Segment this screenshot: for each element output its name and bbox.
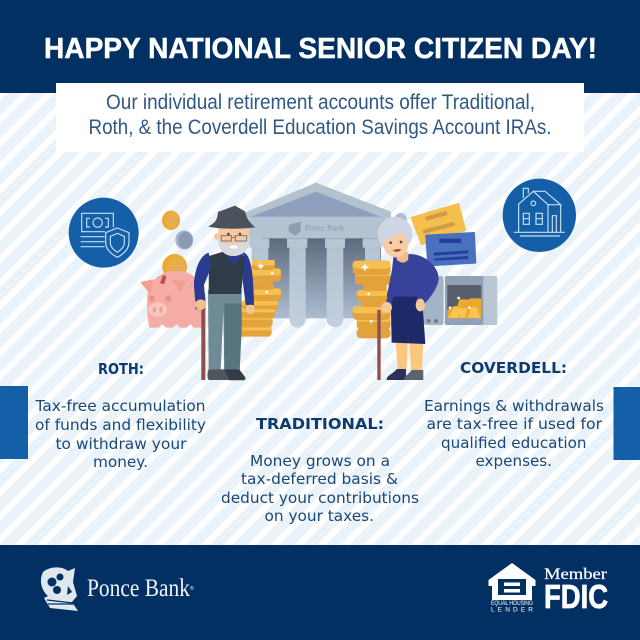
fdic text: FDIC <box>544 579 608 616</box>
traditional heading: TRADITIONAL: <box>256 415 384 433</box>
intro panel <box>56 83 584 152</box>
roth description: Tax-free accumulation <box>34 397 206 415</box>
bank name: Ponce Bank <box>87 575 190 602</box>
illustration: seniors with bank <box>141 183 497 380</box>
coverdell description: expenses. <box>476 452 552 470</box>
traditional description: Money grows on a <box>250 452 390 470</box>
senior man <box>194 206 255 380</box>
traditional column <box>221 415 419 525</box>
cards, phone and safe <box>412 204 497 325</box>
roth column <box>34 360 206 471</box>
equal housing lender logo <box>488 563 536 614</box>
ponce bank logo <box>41 567 194 611</box>
intro text: Roth, & the Coverdell Education Savings Account IRAs. <box>88 115 552 139</box>
roth description: of funds and flexibility <box>35 416 206 434</box>
coverdell column <box>424 359 604 470</box>
footer band <box>0 545 640 640</box>
senior woman <box>377 213 439 380</box>
traditional description <box>221 452 419 525</box>
roth description <box>34 397 206 471</box>
title: HAPPY NATIONAL SENIOR CITIZEN DAY! <box>44 33 597 65</box>
registered mark: ® <box>190 585 194 592</box>
icon: conquistador crest <box>41 567 78 611</box>
lender text: LENDER <box>491 606 533 614</box>
traditional description: tax-deferred basis & <box>241 470 398 488</box>
header band <box>0 0 640 93</box>
coin stack right <box>353 261 391 338</box>
icon: house <box>503 179 576 252</box>
coins and piggy bank <box>141 211 206 328</box>
icon: house with equal sign <box>488 563 536 600</box>
traditional description: on your taxes. <box>264 507 374 525</box>
roth description: money. <box>93 453 148 471</box>
icon: banknote and shield <box>69 198 139 268</box>
coin stack left <box>238 260 281 337</box>
traditional description: deduct your contributions <box>221 489 419 507</box>
equal housing text: EQUAL HOUSING <box>491 601 533 607</box>
bank building <box>242 183 391 327</box>
coverdell description: qualified education <box>441 434 586 452</box>
fdic logo <box>544 566 608 616</box>
roth heading: ROTH: <box>98 360 144 378</box>
striped background <box>0 93 640 545</box>
coverdell description: are tax-free if used for <box>426 415 603 433</box>
intro text: Our individual retirement accounts offer Traditional, <box>106 90 535 114</box>
roth description: to withdraw your <box>56 435 187 453</box>
member text: Member <box>544 566 608 583</box>
bank building: Ponce Bank <box>305 224 344 233</box>
side tab left <box>0 386 28 459</box>
coverdell heading: COVERDELL: <box>460 359 567 377</box>
side tab right <box>614 387 640 460</box>
coverdell description <box>424 397 604 470</box>
coverdell description: Earnings & withdrawals <box>424 397 604 415</box>
intro text <box>88 90 552 139</box>
